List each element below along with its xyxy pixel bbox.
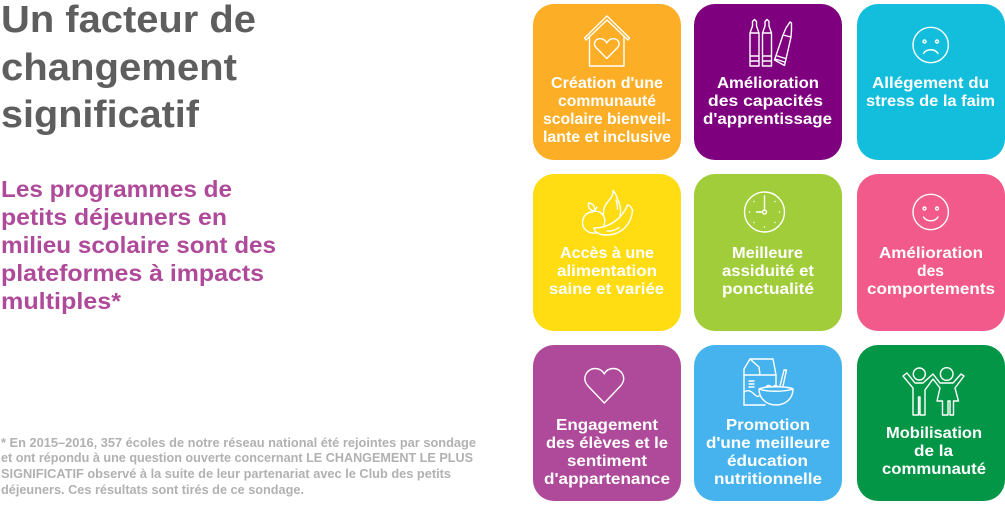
label: d'appartenance	[544, 471, 670, 488]
icon: house with heart	[584, 16, 630, 66]
label: saine et variée	[549, 281, 664, 298]
label: éducation	[727, 453, 808, 470]
subheading	[1, 176, 276, 314]
label: assiduité et	[722, 263, 815, 280]
label: Meilleure	[732, 245, 803, 262]
label: Amélioration	[879, 245, 983, 262]
icon: fruits	[582, 190, 632, 235]
label	[722, 245, 815, 298]
label	[866, 75, 995, 110]
label: scolaire bienveil-	[543, 111, 671, 128]
title: significatif	[1, 94, 199, 136]
label: nutritionnelle	[714, 471, 822, 488]
title	[1, 0, 256, 136]
title: changement	[1, 47, 237, 89]
label: des élèves et le	[546, 435, 668, 452]
label: Mobilisation	[886, 425, 982, 442]
icon: heart	[585, 368, 624, 403]
label: Promotion	[726, 417, 810, 434]
label	[703, 75, 832, 128]
label: stress de la faim	[866, 93, 995, 110]
subheading: multiples*	[1, 288, 121, 314]
label: Création d'une	[551, 75, 663, 92]
label	[543, 75, 671, 146]
label	[544, 417, 670, 488]
panel: amélioration des comportements	[857, 174, 1005, 331]
panel: éducation nutritionnelle	[694, 345, 842, 501]
icon: clock	[744, 192, 784, 232]
label: comportements	[867, 281, 995, 298]
icon: two children holding hands	[903, 368, 964, 415]
subheading: Les programmes de	[1, 176, 232, 202]
icon: sad face	[913, 27, 948, 63]
icon: crayons	[750, 20, 792, 66]
label: d'apprentissage	[703, 111, 832, 128]
panel: allégement du stress de la faim	[857, 4, 1005, 160]
label: Accès à une	[560, 245, 654, 262]
label: sentiment	[567, 453, 648, 470]
label	[549, 245, 664, 298]
label	[706, 417, 830, 488]
label: ponctualité	[722, 281, 814, 298]
footnote: * En 2015–2016, 357 écoles de notre réseau national été rejointes par sondage	[1, 436, 476, 450]
footnote: et ont répondu à une question ouverte concernant LE CHANGEMENT LE PLUS	[1, 451, 473, 465]
panel: assiduité et ponctualité	[694, 174, 842, 331]
footnote	[1, 436, 476, 497]
panel: capacités d'apprentissage	[694, 4, 842, 160]
label: Allégement du	[872, 75, 989, 92]
panel: engagement des élèves	[533, 345, 681, 501]
subheading: milieu scolaire sont des	[1, 232, 276, 258]
label: Engagement	[556, 417, 659, 434]
panel: création d'une communauté	[533, 4, 681, 160]
title: Un facteur de	[1, 0, 256, 41]
footnote: SIGNIFICATIF observé à la suite de leur partenariat avec le Club des petits	[1, 467, 451, 481]
label: des capacités	[708, 93, 823, 110]
subheading: petits déjeuners en	[1, 204, 227, 230]
icon: smiling face	[913, 194, 948, 230]
label: Amélioration	[717, 75, 819, 92]
icon: milk carton and bowl	[744, 359, 793, 405]
label: communauté	[558, 93, 656, 110]
label	[882, 425, 986, 478]
subheading: plateformes à impacts	[1, 260, 264, 286]
label: alimentation	[557, 263, 657, 280]
panel: alimentation saine	[533, 174, 681, 331]
label: lante et inclusive	[543, 129, 671, 146]
footnote: déjeuners. Ces résultats sont tirés de ce sondage.	[1, 483, 304, 497]
label: d'une meilleure	[706, 435, 830, 452]
label: communauté	[882, 461, 986, 478]
label: de la	[914, 443, 953, 460]
panel: mobilisation de la communauté	[857, 345, 1005, 501]
label	[867, 245, 995, 298]
label: des	[917, 263, 944, 280]
